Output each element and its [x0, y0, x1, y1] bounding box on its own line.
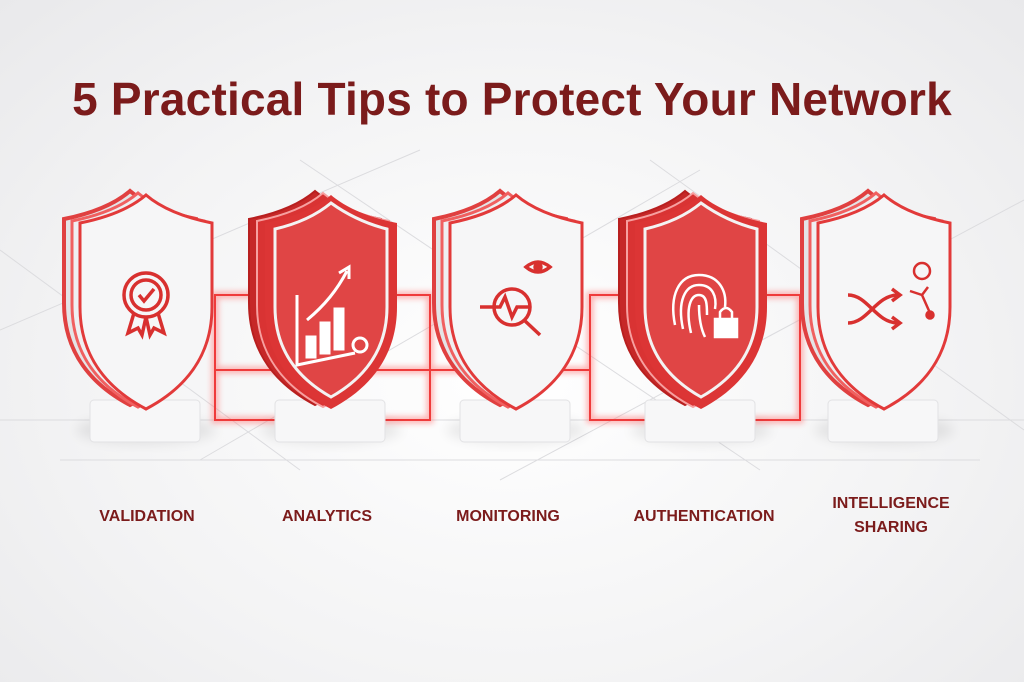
label: validation: VALIDATION: [99, 508, 195, 525]
shield: monitoring: [434, 191, 586, 444]
title: 5 Practical Tips to Protect Your Network: [72, 73, 952, 125]
connectors: [215, 295, 800, 420]
icon: shuffle bulb: [848, 263, 933, 329]
label: intelligence sharing: INTELLIGENCE: [832, 495, 950, 512]
shield: authentication: [619, 191, 771, 444]
icon: analytics chart: [297, 267, 367, 365]
icon: fingerprint lock: [673, 275, 737, 337]
label: intelligence sharing: SHARING: [854, 519, 928, 536]
shield: intelligence sharing: [802, 191, 954, 444]
label: monitoring: MONITORING: [456, 508, 560, 525]
label: intelligence sharing: [832, 495, 950, 536]
icon: magnifier pulse eye: [480, 262, 550, 335]
shield: validation: [64, 191, 216, 444]
shield: analytics: [249, 191, 401, 444]
label: authentication: AUTHENTICATION: [633, 508, 775, 525]
icon: award badge: [124, 273, 168, 335]
label: analytics: ANALYTICS: [282, 508, 372, 525]
